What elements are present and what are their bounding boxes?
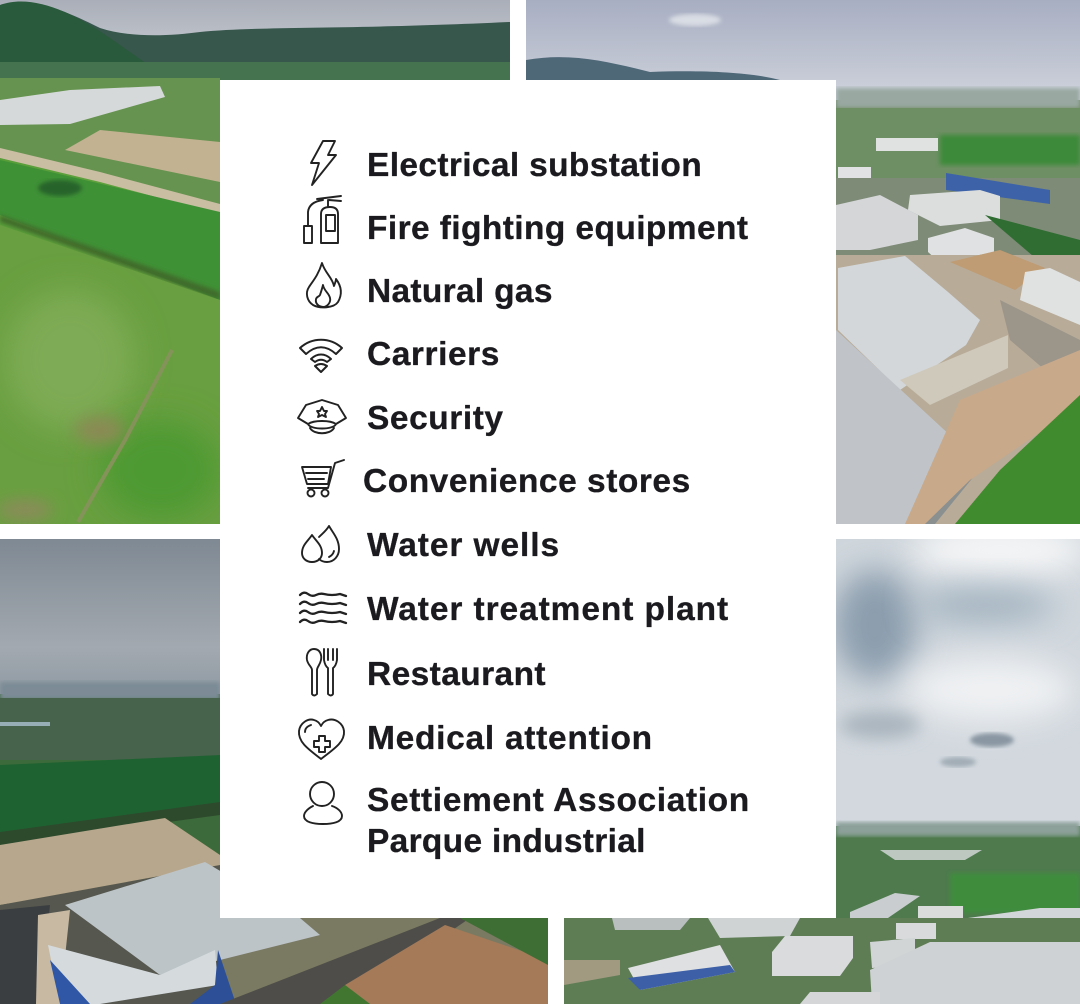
icon: spoon and fork [306, 648, 338, 696]
item: restaurant [306, 648, 546, 696]
photo: green field, top left [0, 0, 510, 524]
icon: heart with cross [298, 718, 345, 760]
panel: service list: Natural gas [367, 273, 553, 310]
panel: service list: Settiement Association [367, 782, 750, 819]
photo: field and warehouse, bottom left [0, 539, 548, 1004]
icon: wifi signal [299, 338, 343, 373]
item: water wells [301, 525, 560, 564]
icon: fire extinguisher [303, 195, 342, 244]
panel: service list: Water treatment plant [367, 591, 729, 628]
item: natural gas [306, 262, 553, 310]
item: convenience stores [301, 459, 691, 500]
panel: service list [220, 80, 836, 918]
panel: service list: Medical attention [367, 720, 653, 757]
panel: service list: Electrical substation [367, 147, 702, 184]
icon: shopping cart [301, 459, 345, 498]
panel: service list: Parque industrial [367, 823, 646, 860]
item: settlement association [303, 781, 750, 860]
panel: service list: Water wells [367, 527, 560, 564]
item: electrical substation [310, 140, 702, 186]
icon: lightning bolt [310, 140, 337, 186]
panel: service list: Carriers [367, 336, 500, 373]
icon: waves [298, 592, 348, 624]
panel: service list: Restaurant [367, 656, 546, 693]
icon: water drops [301, 525, 340, 563]
icon: police cap [297, 399, 347, 434]
item: security [297, 399, 504, 437]
panel: service list: Convenience stores [363, 463, 691, 500]
panel: service list: Fire fighting equipment [367, 210, 748, 247]
item: fire fighting equipment [303, 195, 748, 247]
panel: service list: Security [367, 400, 504, 437]
item: carriers [299, 336, 500, 373]
icon: flame [306, 262, 342, 308]
icon: user profile [303, 781, 343, 825]
photo: cloudy sky and industrial park, bottom right [564, 522, 1080, 1004]
photo: industrial buildings, top right [526, 0, 1080, 524]
item: water treatment plant [298, 591, 729, 628]
item: medical attention [298, 718, 653, 760]
